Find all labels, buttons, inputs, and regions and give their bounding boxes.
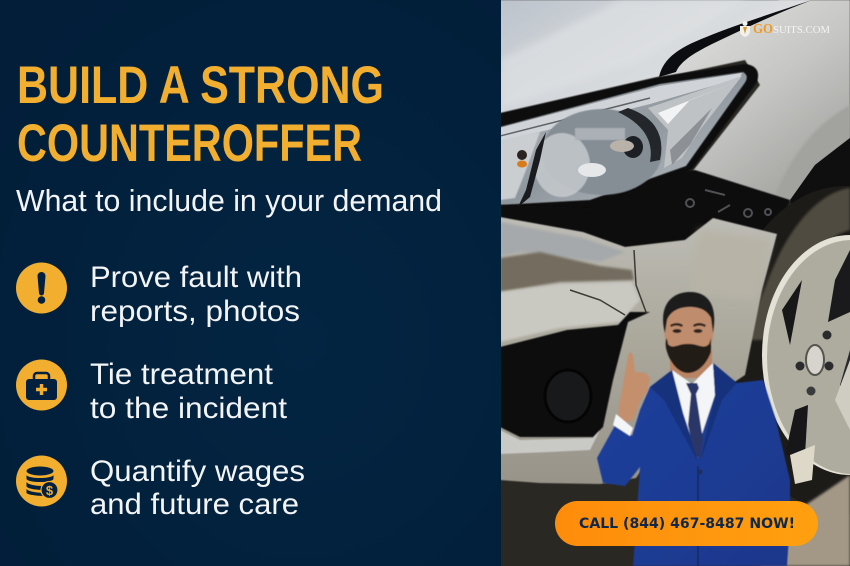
logo: GoSuits.com [740,21,830,37]
button: call now: CALL (844) 467-8487 NOW! [579,516,795,532]
eyes and brows [670,323,706,333]
button: call now [555,501,818,546]
icon: coins with dollar [16,456,67,506]
list item: tie treatment [16,358,288,425]
subtitle: What to include in your demand [16,183,442,218]
wheel [736,186,850,504]
logo wordmark: GO [753,22,773,37]
icon: coins with dollar: $ [46,483,54,498]
text: quantify wages: Quantify wages [90,455,305,488]
text: tie treatment: Tie treatment [90,358,274,391]
headlight housing [500,64,758,214]
pavement [760,475,850,566]
fog lamp cavity [500,312,650,454]
raised hand [618,352,650,425]
head [664,297,714,368]
black grille gap [500,170,790,247]
title: BUILD A STRONG [17,56,384,115]
fender [660,0,850,201]
tie [686,383,703,458]
logo wordmark: SUITS.COM [773,24,830,36]
jacket front line [697,466,699,566]
beard [666,338,711,373]
logo icon [740,21,750,37]
neck [670,350,712,378]
panel: left navy background [0,0,501,566]
bumper [500,217,777,484]
hood black seam [659,0,812,77]
photo base [500,0,850,566]
text: prove fault: Prove fault with [90,261,302,294]
hood [500,0,812,115]
icon: medical case [16,360,67,410]
bumper highlights and cracks [500,222,770,342]
icon: exclamation [16,262,67,314]
title: COUNTEROFFER [17,114,362,173]
text: prove fault: reports, photos [90,295,300,328]
list item: quantify wages [16,455,305,521]
lapel lines [650,363,737,462]
grille detail [686,190,771,217]
title [17,56,384,173]
list item: prove fault [16,261,302,328]
jacket button [698,470,702,474]
wheel arch dark [790,138,850,204]
hood highlight [500,0,750,108]
suit [597,363,790,566]
hair [663,292,714,333]
shirt [672,363,715,458]
person: attorney in blue suit [597,292,790,566]
text: tie treatment: to the incident [90,392,288,425]
panel: car damage photo [500,0,850,566]
text: quantify wages: and future care [90,488,299,521]
fender shade [783,106,850,197]
shirt cuff [613,414,633,436]
